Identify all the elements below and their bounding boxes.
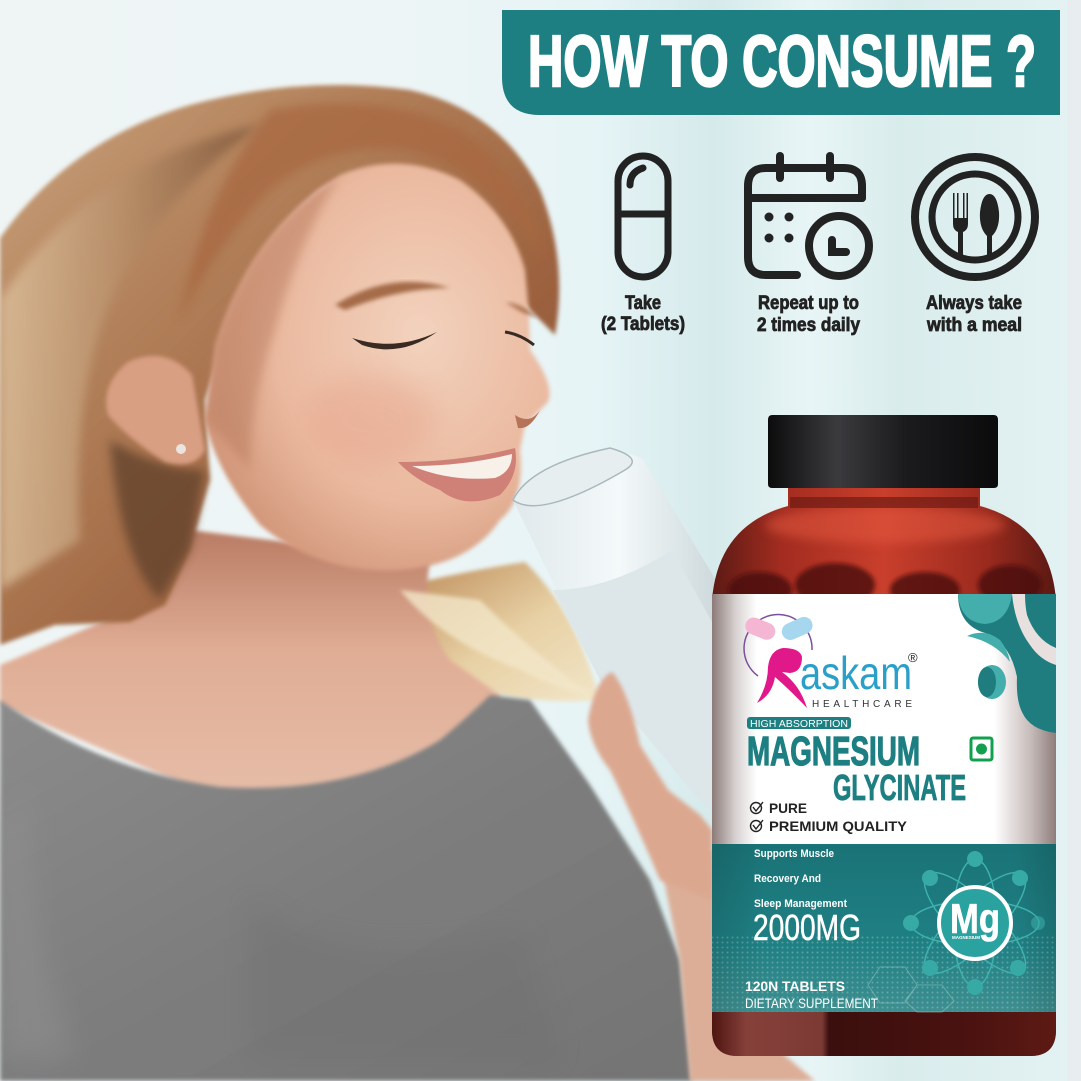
glass of water <box>513 448 725 810</box>
hand <box>588 672 712 900</box>
high absorption tag: HIGH ABSORPTION <box>750 718 848 730</box>
logo ring <box>744 615 812 676</box>
brand logo: Raskam: HEALTHCARE <box>812 699 912 710</box>
shadow under hair <box>205 175 340 470</box>
label white <box>712 594 1056 844</box>
label: Always take <box>926 292 1022 314</box>
product name <box>747 728 966 808</box>
dietary supplement: DIETARY SUPPLEMENT <box>745 996 878 1011</box>
closed eyes <box>352 332 437 349</box>
magnesium atom graphic: MAGNESIUM <box>952 935 980 940</box>
step 3: with a meal <box>915 157 1035 336</box>
woman drinking water <box>0 85 815 1081</box>
label: 2 times daily <box>757 314 860 336</box>
shirt <box>0 695 692 1081</box>
icon: veg mark <box>971 738 992 760</box>
step 1: take tablets <box>601 156 685 335</box>
quality checks <box>750 800 908 834</box>
product name: GLYCINATE <box>833 767 966 808</box>
bottle cap <box>768 415 998 488</box>
step 2: repeat daily <box>748 156 869 336</box>
label: with a meal <box>926 314 1022 336</box>
label: Repeat up to <box>758 292 859 314</box>
benefit text: Recovery And <box>754 873 821 885</box>
neck and chest <box>0 530 500 800</box>
label teal band <box>712 844 1056 1012</box>
brand logo: Raskam: ® <box>908 650 918 665</box>
tablets visible in bottle <box>728 563 1042 608</box>
hair shadow below ear <box>110 440 205 600</box>
forearm <box>660 850 815 1081</box>
hair <box>0 85 559 645</box>
blond hair behind neck <box>385 562 600 701</box>
icon: calendar with clock <box>748 156 869 276</box>
face <box>205 164 550 570</box>
cheek blush <box>305 375 435 465</box>
icon: plate with fork and spoon <box>915 157 1035 277</box>
logo capsules <box>743 615 778 642</box>
dosage: 2000MG <box>753 907 861 948</box>
label: (2 Tablets) <box>601 313 685 335</box>
decorative hexagons <box>868 967 954 1012</box>
label <box>757 292 860 336</box>
magnesium atom graphic <box>903 851 1045 995</box>
label: Take <box>625 292 661 314</box>
magnesium atom graphic: Mg <box>950 895 1000 942</box>
benefit text <box>754 848 847 910</box>
header banner <box>502 10 1060 115</box>
tablet count: 120N TABLETS <box>745 979 845 994</box>
benefit text: Supports Muscle <box>754 848 834 860</box>
wordmark: askam <box>800 647 912 699</box>
bottle glass <box>712 488 1056 1056</box>
brow <box>335 282 450 310</box>
quality checks: PURE <box>769 800 807 816</box>
hair highlights <box>0 125 260 590</box>
brand logo: Raskam <box>743 614 918 710</box>
benefit text: Sleep Management <box>754 898 847 910</box>
product name: MAGNESIUM <box>747 728 920 774</box>
nose shadow <box>515 410 540 428</box>
label <box>926 292 1022 336</box>
logo R <box>757 648 807 708</box>
decorative teal blobs <box>958 594 1056 733</box>
icon: capsule <box>618 156 668 277</box>
ear <box>106 356 205 464</box>
quality checks: PREMIUM QUALITY <box>769 818 908 834</box>
label <box>601 292 685 335</box>
product bottle <box>712 415 1056 1056</box>
tablet count <box>745 979 878 1011</box>
mouth <box>398 448 516 501</box>
